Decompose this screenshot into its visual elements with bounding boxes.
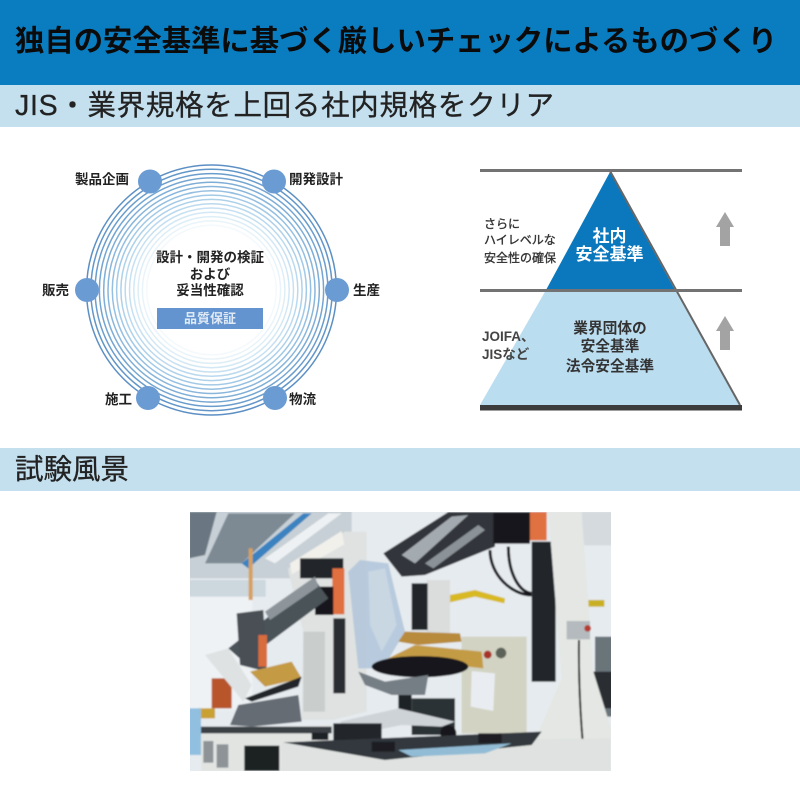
base line	[480, 405, 742, 410]
upper tier	[546, 172, 675, 290]
lower tier label: 法令安全基準	[566, 357, 654, 375]
quality assurance label	[157, 308, 263, 329]
node dots	[75, 170, 349, 410]
center text	[156, 249, 264, 298]
upper side note	[484, 217, 556, 265]
chair under test	[348, 560, 405, 668]
top line	[480, 169, 742, 172]
upper tier label: 社内	[592, 227, 626, 246]
upper side note: さらに	[484, 217, 520, 231]
lower side note: JISなど	[482, 347, 530, 362]
arrow up	[716, 316, 734, 350]
center text: 妥当性確認	[176, 282, 244, 298]
upper side note: 安全性の確保	[484, 250, 556, 265]
concentric rings	[86, 165, 336, 415]
section heading: in-house standards	[0, 85, 800, 127]
node labels: 施工	[105, 391, 132, 407]
middle line	[480, 289, 742, 292]
node labels: 生産	[353, 282, 380, 298]
center text: および	[190, 267, 231, 282]
section heading text: JIS・業界規格を上回る社内規格をクリア	[15, 90, 555, 122]
section heading text: 試験風景	[15, 454, 129, 486]
lower side note: JOIFA、	[482, 329, 535, 344]
node labels	[42, 171, 380, 407]
diagram: safety standard pyramid	[480, 169, 742, 410]
lower tier label: 業界団体の	[573, 319, 647, 337]
photo: chair durability test machines	[185, 508, 615, 775]
node labels: 販売	[42, 282, 69, 298]
back machine	[288, 532, 367, 720]
upper side note: ハイレベルな	[484, 233, 556, 247]
lower tier label: 安全基準	[581, 337, 640, 355]
upper tier label	[576, 227, 644, 264]
diagram: quality assurance cycle	[42, 165, 380, 415]
upper tier label: 安全基準	[576, 244, 644, 264]
title banner	[0, 0, 800, 85]
node labels: 物流	[289, 391, 316, 407]
front machine	[427, 580, 450, 633]
title: 独自の安全基準に基づく厳しいチェックによるものづくり	[15, 25, 777, 58]
node labels: 製品企画	[75, 171, 129, 187]
lower tier	[480, 290, 740, 405]
arrow up	[716, 212, 734, 246]
pyramid right edge	[610, 171, 740, 405]
node labels: 開発設計	[289, 172, 343, 187]
quality assurance label: 品質保証	[184, 311, 236, 326]
lower tier label	[566, 319, 654, 375]
bases	[201, 725, 332, 771]
section heading: test scene	[0, 448, 800, 491]
lower side note	[482, 329, 535, 362]
center text: 設計・開発の検証	[156, 249, 264, 265]
